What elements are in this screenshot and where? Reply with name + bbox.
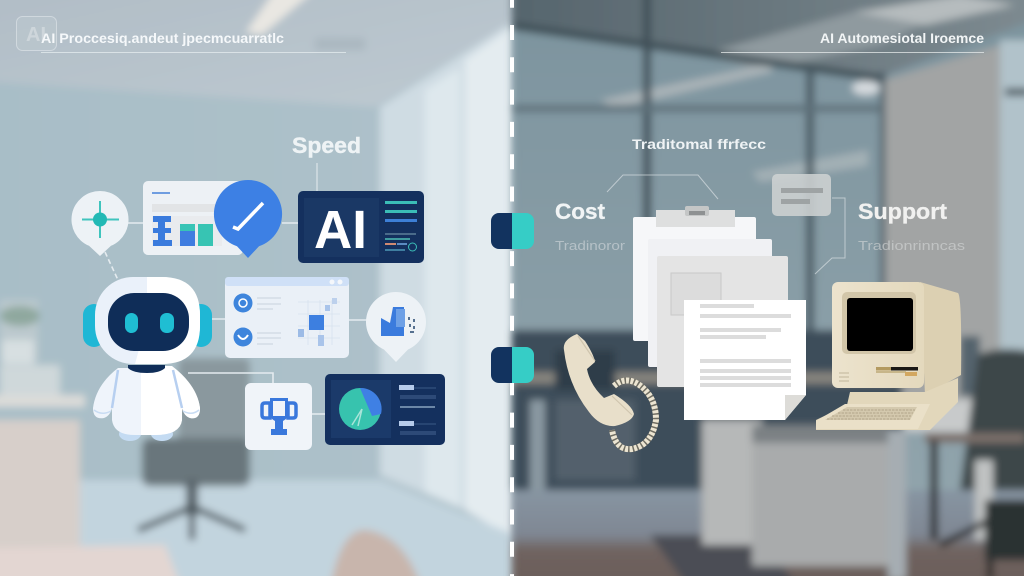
traditional side: bracket lines: [607, 175, 845, 274]
sheet 1: [633, 217, 756, 341]
phone cord: [612, 380, 656, 449]
icon: trophy card: [245, 383, 312, 450]
robot body: [93, 365, 200, 441]
pound-like glyph: [153, 216, 172, 246]
AI side: speed label: [292, 133, 361, 191]
computer base: [816, 378, 958, 430]
screen bezel: [842, 292, 916, 354]
sheet 4 front: [684, 300, 806, 420]
icon: blue check bubble: [214, 180, 282, 258]
icon: target pin bubble: [71, 191, 129, 256]
sheet 3: [657, 256, 788, 387]
sheet 2: [648, 239, 772, 367]
left title text: AI Proccesiq.andeut jpecmcuarratlc: [41, 30, 284, 46]
support label: Support: [858, 199, 948, 224]
AI side: speed label: Speed: [292, 133, 361, 158]
panel: bar chart card: [143, 181, 243, 255]
icon: vintage computer: [816, 282, 961, 430]
logo badge: [16, 16, 56, 50]
traditional side: heading: Traditomal ffrfecc: [632, 136, 766, 152]
screen: [847, 298, 913, 351]
connector lines: [105, 223, 368, 414]
icon: telephone handset: [564, 334, 656, 449]
monitor front: [832, 282, 924, 388]
panel: task list and grid: [225, 277, 349, 358]
cost label: Cost: [555, 199, 606, 224]
monitor side: [920, 282, 961, 395]
icon: building bubble: [366, 292, 426, 362]
background: bright office, left half: [0, 0, 515, 576]
toggle tab upper: [491, 213, 534, 249]
support sublabel: Tradionrinncas: [858, 238, 966, 253]
robot mascot: [83, 277, 212, 441]
logo badge: AI: [26, 24, 46, 46]
background: dim office, right half: [512, 0, 1024, 576]
clipboard clip: [656, 206, 735, 227]
panel: pie chart dashboard: [325, 374, 445, 445]
vent lines: [839, 373, 849, 381]
right title text: AI Automesiotal Iroemce: [820, 30, 984, 46]
pie chart: [339, 388, 382, 430]
paper stack: [633, 206, 806, 420]
AI big letters: AI: [314, 200, 367, 260]
keyboard: [816, 404, 930, 429]
robot ears: [83, 304, 212, 347]
robot head: [95, 277, 200, 364]
header: left panel title: [16, 16, 346, 53]
toggle tab lower: [491, 347, 534, 383]
central divider: [491, 0, 534, 576]
panel: AI dashboard: [298, 191, 424, 263]
disk slot: [876, 367, 918, 376]
cost label: [555, 199, 626, 253]
support label: [858, 199, 966, 253]
cost sublabel: Tradinoror: [555, 238, 626, 253]
icon: note card: [772, 174, 831, 216]
